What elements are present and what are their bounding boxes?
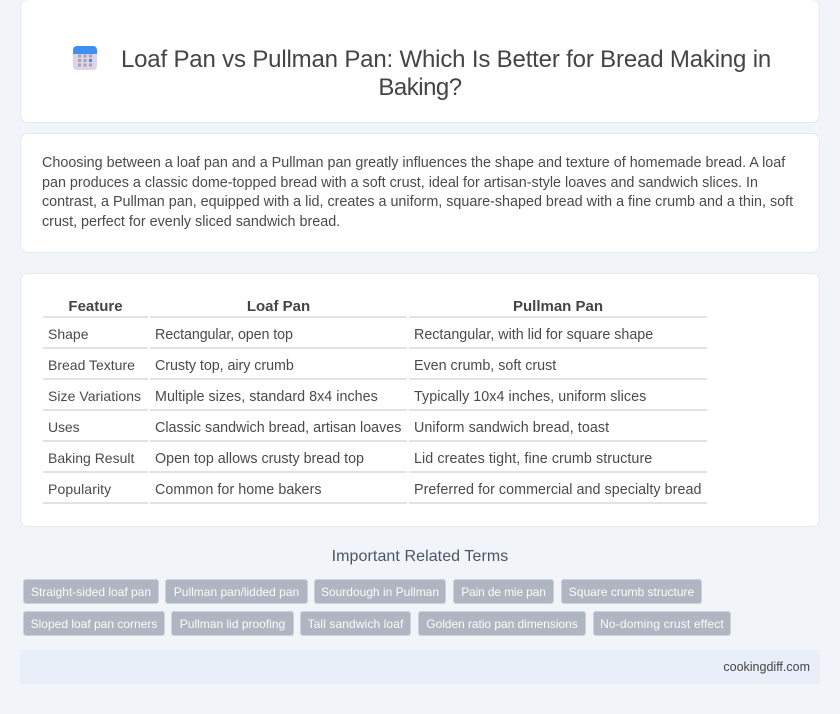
- tag: Tall sandwich loaf: [308, 617, 403, 631]
- row: shape: Shape: [48, 326, 88, 342]
- row: shape: Rectangular, open top: [155, 327, 293, 343]
- row: size variations: [48, 388, 646, 405]
- row: size variations: Typically 10x4 inches, uniform slices: [414, 389, 646, 405]
- intro text: pan produces a classic dome-topped bread with a soft crust, ideal for artisan-style loaves and sandwich slices. In: [42, 175, 758, 191]
- tag: [453, 579, 554, 604]
- table: [43, 298, 707, 504]
- table header: Pullman Pan: [513, 298, 603, 315]
- row: popularity: Common for home bakers: [155, 482, 322, 498]
- row: popularity: Popularity: [48, 481, 111, 497]
- row: bread texture: Crusty top, airy crumb: [155, 358, 294, 374]
- tag: [314, 579, 446, 604]
- row: bread texture: [48, 357, 556, 374]
- row: popularity: Preferred for commercial and specialty bread: [414, 482, 701, 498]
- intro text: [42, 155, 793, 230]
- tag: Square crumb structure: [569, 585, 694, 599]
- tag: [23, 611, 165, 636]
- tags: related terms: [23, 579, 731, 636]
- row: uses: Uniform sandwich bread, toast: [414, 420, 609, 436]
- row: baking result: Baking Result: [48, 450, 134, 466]
- table header: [68, 298, 603, 315]
- table header: Feature: [68, 298, 123, 315]
- tag: Straight-sided loaf pan: [31, 585, 151, 599]
- panel: introduction: [20, 133, 820, 253]
- title: [121, 46, 771, 101]
- row: bread texture: Even crumb, soft crust: [414, 358, 556, 374]
- row: popularity: [48, 481, 701, 498]
- tag: Golden ratio pan dimensions: [426, 617, 578, 631]
- tag: [561, 579, 702, 604]
- footer source: cookingdiff.com: [723, 660, 810, 674]
- tag: Sourdough in Pullman: [321, 585, 439, 599]
- row: shape: Rectangular, with lid for square shape: [414, 327, 653, 343]
- row: bread texture: Bread Texture: [48, 357, 135, 373]
- tag: [171, 611, 294, 636]
- table header: Loaf Pan: [247, 298, 310, 315]
- row: uses: [48, 419, 609, 436]
- row: shape: [48, 326, 653, 343]
- tag: Pullman lid proofing: [180, 617, 285, 631]
- heading: related terms: Important Related Terms: [332, 548, 508, 565]
- row: baking result: Lid creates tight, fine crumb structure: [414, 451, 652, 467]
- title: Loaf Pan vs Pullman Pan: Which Is Better for Bread Making in: [121, 46, 771, 73]
- row: baking result: Open top allows crusty bread top: [155, 451, 364, 467]
- intro text: contrast, a Pullman pan, equipped with a lid, creates a uniform, square-shaped bread with a fine crumb and a thin, soft: [42, 194, 793, 210]
- tag: [165, 579, 308, 604]
- tag: Pain de mie pan: [461, 585, 546, 599]
- row: size variations: Multiple sizes, standard 8x4 inches: [155, 389, 378, 405]
- tag: [23, 579, 159, 604]
- row: uses: Classic sandwich bread, artisan loaves: [155, 420, 401, 436]
- tag: [418, 611, 586, 636]
- panel: comparison table: [20, 273, 820, 527]
- tag: [593, 611, 731, 636]
- row: baking result: [48, 450, 652, 467]
- tag: [300, 611, 411, 636]
- row: size variations: Size Variations: [48, 388, 141, 404]
- title: Baking?: [378, 74, 462, 101]
- panel: title header: [20, 0, 820, 123]
- icon: calendar: [73, 46, 97, 70]
- tag: Sloped loaf pan corners: [31, 617, 157, 631]
- tag: No-doming crust effect: [600, 617, 724, 631]
- tag: Pullman pan/lidded pan: [174, 585, 299, 599]
- intro text: Choosing between a loaf pan and a Pullman pan greatly influences the shape and texture of homemade bread. A loaf: [42, 155, 785, 171]
- intro text: crust, perfect for evenly sliced sandwich bread.: [42, 214, 340, 230]
- row: uses: Uses: [48, 419, 80, 435]
- footer bar: [20, 650, 820, 684]
